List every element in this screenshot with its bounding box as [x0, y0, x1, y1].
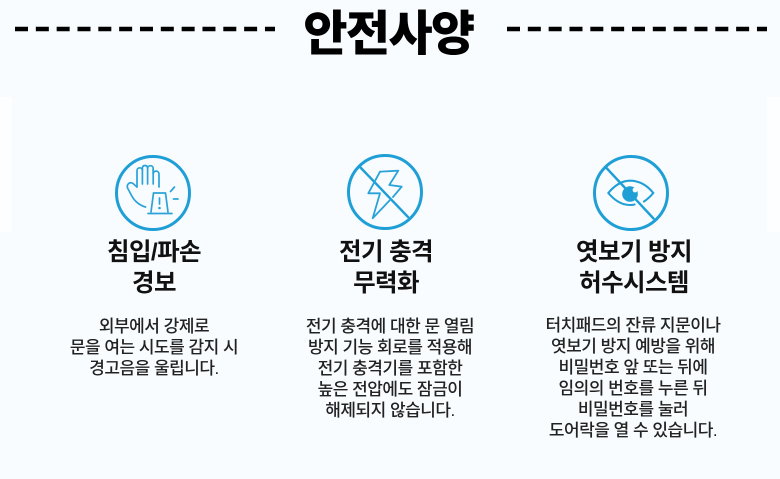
heading: electric shock: 전기 충격	[339, 239, 433, 266]
icon: peeping eye prohibited	[593, 155, 669, 231]
text: electric shock description: 전기 충격에 대한 문 열림	[306, 316, 474, 336]
heading: electric shock	[339, 239, 433, 296]
text: electric shock description: 해제되지 않습니다.	[325, 400, 455, 420]
text: intrusion description	[70, 317, 238, 378]
text: anti-peeping description: 엿보기 방지 예방을 위해	[551, 337, 715, 356]
icon: electric shock prohibited	[347, 154, 423, 230]
title: 안전사양	[303, 8, 474, 61]
text: electric shock description: 방지 기능 회로를 적용해	[308, 338, 472, 356]
text: anti-peeping description: 도어락을 열 수 있습니다.	[549, 421, 717, 440]
text: electric shock description: 전기 충격기를 포함한	[318, 358, 462, 378]
text: intrusion description: 경고음을 울립니다.	[89, 359, 219, 378]
heading: intrusion alarm: 침입/파손	[107, 239, 201, 266]
text: anti-peeping description: 터치패드의 잔류 지문이나	[546, 316, 720, 335]
left dashed rule	[15, 26, 275, 32]
text: anti-peeping description: 임의의 번호를 누른 뒤	[559, 379, 707, 398]
heading: anti-peeping	[576, 239, 692, 296]
right dashed rule	[507, 26, 767, 32]
heading: intrusion alarm	[107, 239, 201, 296]
text: anti-peeping description: 비밀번호를 눌러	[578, 400, 688, 419]
text: electric shock description: 높은 전압에도 잠금이	[318, 380, 462, 398]
heading: anti-peeping: 허수시스템	[579, 270, 689, 296]
text: intrusion description: 외부에서 강제로	[99, 317, 209, 336]
text: intrusion description: 문을 여는 시도를 감지 시	[70, 338, 238, 357]
text: electric shock description	[306, 316, 474, 420]
text: anti-peeping description	[546, 316, 721, 440]
icon: hand and alarm siren	[115, 155, 191, 231]
text: anti-peeping description: 비밀번호 앞 또는 뒤에	[559, 358, 707, 377]
heading: electric shock: 무력화	[353, 270, 419, 296]
heading: intrusion alarm: 경보	[132, 270, 176, 296]
heading: anti-peeping: 엿보기 방지	[576, 239, 692, 266]
